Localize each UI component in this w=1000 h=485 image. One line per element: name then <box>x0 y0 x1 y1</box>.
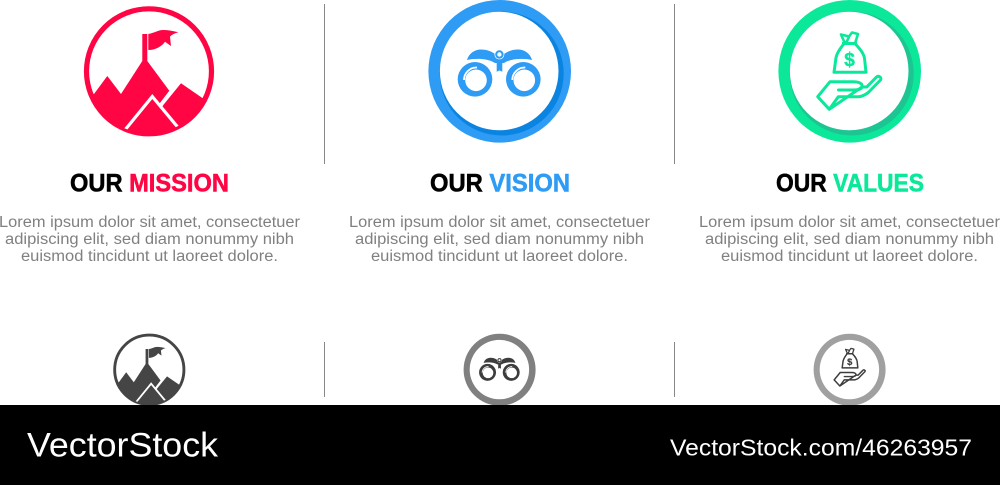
text block: vision description: adipiscing elit, sed diam nonummy nibh <box>355 231 644 248</box>
icon: small grey money bag on hand: $ <box>847 357 853 367</box>
divider: small vision and values <box>674 342 675 397</box>
divider: small mission and vision <box>324 342 325 397</box>
icon: values money bag on hand <box>778 0 921 143</box>
icon: small grey money bag on hand <box>814 334 886 406</box>
icon: mission mountain and flag <box>84 6 214 136</box>
icon: vision binoculars <box>428 0 571 143</box>
footer: black watermark band <box>0 405 1000 485</box>
footer logo text: VectorStock <box>27 426 219 464</box>
divider: mission and vision <box>324 4 325 164</box>
text block: mission description: Lorem ipsum dolor sit amet, consectetuer <box>0 214 300 231</box>
heading: our mission: OUR MISSION <box>70 170 229 198</box>
icon: small grey mission mountain <box>113 334 186 405</box>
icon: small grey binoculars <box>464 334 536 406</box>
text block: vision description: Lorem ipsum dolor sit amet, consectetuer <box>349 214 650 231</box>
heading: our values: OUR VALUES <box>776 170 924 198</box>
text block: values description <box>699 214 1000 265</box>
text block: vision description <box>349 214 650 265</box>
icon: values money bag on hand: $ <box>844 50 855 71</box>
heading: our vision: OUR VISION <box>430 170 570 198</box>
divider: vision and values <box>674 4 675 164</box>
footer url text: VectorStock.com/46263957 <box>670 434 972 460</box>
text block: values description: Lorem ipsum dolor sit amet, consectetuer <box>699 214 1000 231</box>
text block: mission description: euismod tincidunt ut laoreet dolore. <box>21 248 278 265</box>
text block: vision description: euismod tincidunt ut laoreet dolore. <box>371 248 628 265</box>
text block: values description: euismod tincidunt ut laoreet dolore. <box>721 248 978 265</box>
text block: mission description <box>0 214 300 265</box>
text block: mission description: adipiscing elit, sed diam nonummy nibh <box>5 231 294 248</box>
text block: values description: adipiscing elit, sed diam nonummy nibh <box>705 231 994 248</box>
